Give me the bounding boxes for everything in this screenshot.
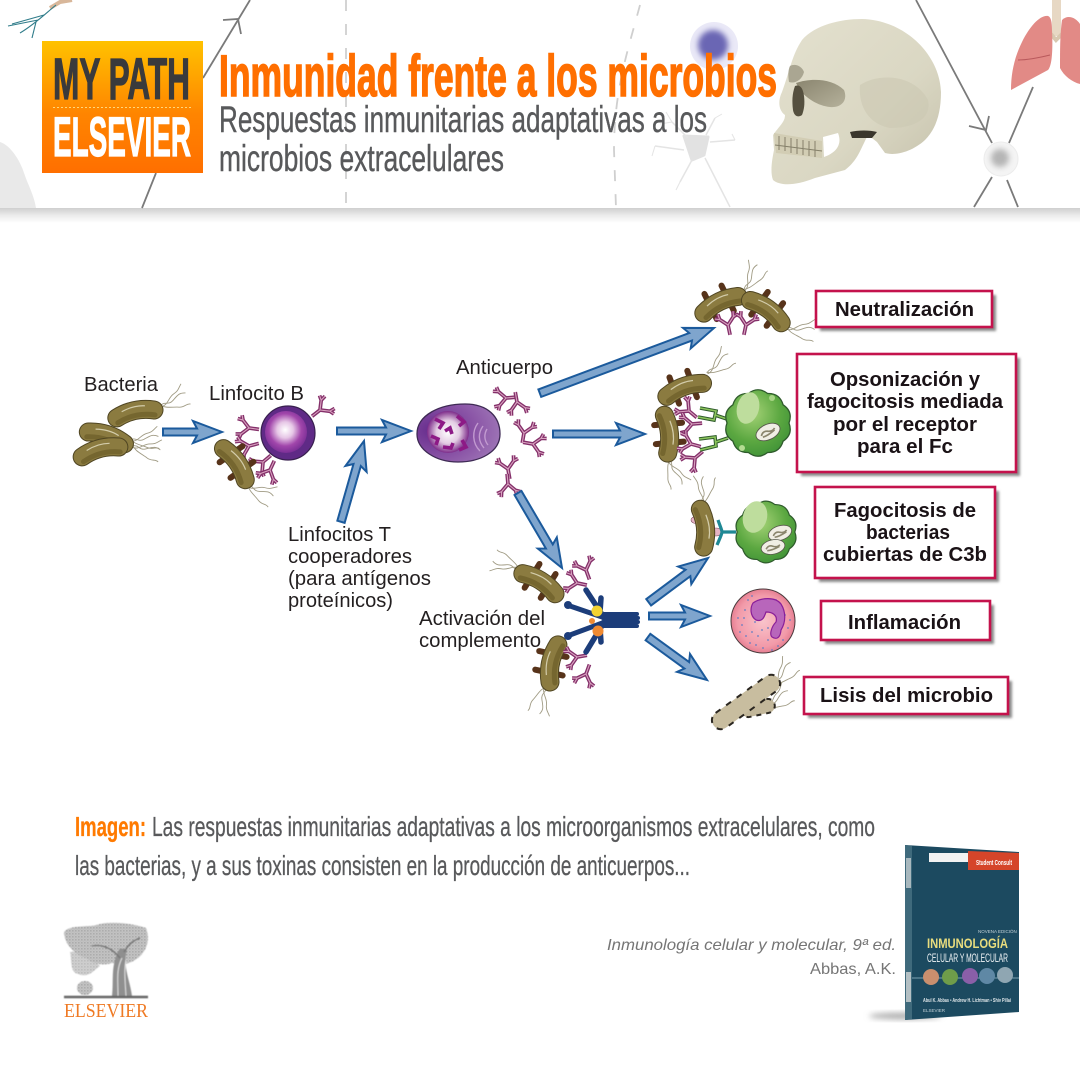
icon: lysed bacteria — [708, 653, 800, 733]
icon: book cover: INMUNOLOGÍA — [927, 935, 1008, 951]
subtitle — [219, 99, 707, 179]
label: Activación del complemento — [419, 608, 545, 652]
icon: blue cell — [690, 22, 738, 70]
label: helper T lymphocytes: (para antígenos — [288, 568, 431, 590]
panel: neutralization label: Neutralización — [835, 299, 974, 321]
label: helper T lymphocytes — [288, 524, 431, 612]
text block: book citation: Abbas, A.K. — [810, 961, 896, 978]
icon: neutrophil — [731, 589, 795, 653]
icon: faded neuron — [652, 112, 735, 207]
panel: opsonization label: por el receptor — [833, 414, 977, 436]
panel: C3b phagocytosis label — [815, 487, 999, 582]
text block: book citation — [607, 937, 896, 978]
icon: skull — [771, 19, 941, 184]
panel: opsonization bacteria and phagocyte — [653, 344, 790, 490]
logo: My Path Elsevier: MY PATH — [53, 47, 190, 112]
label: helper T lymphocytes: cooperadores — [288, 546, 412, 568]
logo: Elsevier tree — [64, 923, 149, 1022]
panel: bacteria cluster — [80, 374, 191, 462]
arrow: bacteria to B cell — [163, 421, 222, 443]
arrow: to inflammation — [649, 605, 710, 627]
icon: book cover: ELSEVIER — [923, 1008, 946, 1013]
label: Activación del complemento: Activación del — [419, 608, 545, 630]
arrow: B cell to plasma cell — [337, 420, 411, 442]
icon: book cover: NOVENA EDICIÓN — [978, 928, 1017, 934]
panel: opsonization label: para el Fc — [857, 436, 953, 458]
icon: faded small skull — [0, 142, 36, 208]
panel: C3b phagocytosis label: cubiertas de C3b — [823, 544, 987, 566]
text block: book citation: Inmunología celular y molecular, 9ª ed. — [607, 937, 896, 954]
header background and shadow — [0, 0, 1080, 223]
arrow: helper T cells — [330, 438, 375, 525]
panel: complement activation — [419, 549, 638, 720]
icon: lungs — [1011, 0, 1080, 90]
subtitle: microbios extracelulares — [219, 138, 504, 179]
arrow: to C3b phagocytosis — [642, 549, 715, 611]
panel: C3b phagocytosis bacterium and phagocyte — [687, 472, 796, 563]
icon: nerve fibre top-left — [8, 0, 72, 38]
label: Anticuerpo: Anticuerpo — [456, 357, 553, 379]
panel: lysis label: Lisis del microbio — [820, 685, 993, 707]
label: helper T lymphocytes: Linfocitos T — [288, 524, 391, 546]
panel: neutralization bacteria — [696, 257, 819, 342]
label: Elsevier wordmark: ELSEVIER — [64, 1000, 149, 1022]
logo: My Path Elsevier: ELSEVIER — [53, 105, 191, 168]
text block: image caption: Imagen: — [75, 811, 146, 842]
icon: book cover: Abul K. Abbas • Andrew H. Lichtman • Shiv Pillai — [923, 998, 1011, 1004]
panel: C3b phagocytosis label: bacterias — [866, 522, 950, 544]
header decorative pathway lines — [142, 0, 1033, 208]
panel: neutralization label — [816, 291, 996, 331]
icon: book cover — [869, 845, 1019, 1020]
icon: grey cell — [984, 142, 1018, 176]
arrow: to opsonization — [553, 423, 645, 445]
panel: C3b phagocytosis label: Fagocitosis de — [834, 500, 976, 522]
label: Linfocito B: Linfocito B — [209, 383, 304, 405]
label: Bacteria: Bacteria — [84, 374, 159, 396]
label: Activación del complemento: complemento — [419, 630, 541, 652]
subtitle: Respuestas inmunitarias adaptativas a los — [219, 99, 707, 140]
panel: B lymphocyte — [209, 383, 337, 508]
arrow: to lysis — [641, 628, 713, 689]
panel: opsonization label: Opsonización y — [830, 369, 981, 391]
panel: lysis label — [804, 677, 1012, 718]
panel: opsonization label — [797, 354, 1020, 476]
arrow: to complement activation — [508, 487, 571, 574]
text block: image caption: las bacterias, y a sus toxinas consisten en la producción de anticuerpos... — [75, 850, 690, 881]
arrow: to neutralization — [536, 318, 718, 403]
label: helper T lymphocytes: proteínicos) — [288, 590, 393, 612]
panel: opsonization label: fagocitosis mediada — [807, 391, 1004, 413]
logo: My Path Elsevier — [42, 41, 203, 173]
icon: book cover: Student Consult — [976, 860, 1012, 867]
panel: inflammation label: Inflamación — [848, 612, 961, 634]
text block: image caption — [75, 811, 875, 881]
panel: inflammation label — [821, 601, 994, 644]
panel: plasma cell and antibodies — [417, 357, 553, 497]
icon: book cover: CELULAR Y MOLECULAR — [927, 951, 1008, 965]
